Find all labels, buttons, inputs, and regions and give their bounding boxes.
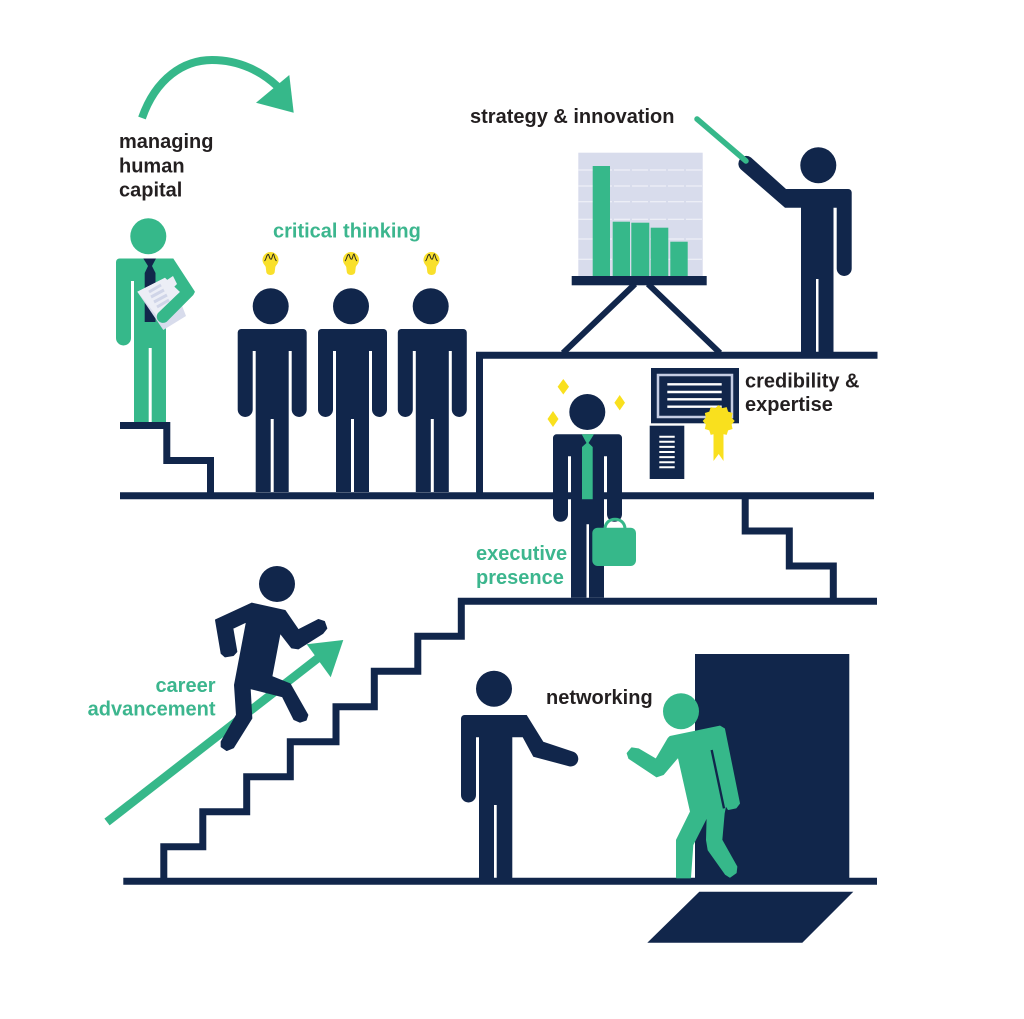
forearm <box>157 291 195 323</box>
icon: document <box>650 426 684 479</box>
figure: thinker 1 <box>238 288 307 492</box>
easel stand <box>563 276 720 353</box>
door shadow <box>647 892 853 943</box>
label: credibility & expertise: credibility & <box>745 370 859 392</box>
icon: briefcase <box>592 519 636 566</box>
upper floor with wall <box>480 355 878 496</box>
figure: presenter <box>738 147 852 352</box>
figure: executive <box>553 394 622 598</box>
figure: thinker 2 <box>318 288 387 492</box>
figure: networking man <box>461 671 578 878</box>
icon: light bulb 2 <box>343 252 359 275</box>
label: career advancement: advancement <box>88 699 216 721</box>
label: executive presence: presence <box>476 567 564 589</box>
label: managing human capital: capital <box>119 180 182 202</box>
icon: light bulb 1 <box>262 252 278 275</box>
figure: green networking person <box>627 693 739 878</box>
lower-right stairs <box>745 497 833 600</box>
icon: light bulb 3 <box>424 252 440 275</box>
label: managing human capital: human <box>119 156 185 178</box>
icon: certificate <box>651 368 739 423</box>
label: critical thinking: critical thinking <box>273 220 421 242</box>
icon: sparkles <box>548 379 625 427</box>
figure: thinker 3 <box>398 288 467 492</box>
main staircase and ground floor <box>123 601 877 881</box>
arrow: career advancement <box>107 640 343 822</box>
bar chart on stand <box>563 153 720 353</box>
label: career advancement: career <box>155 675 216 697</box>
figure: climbing runner <box>216 566 327 750</box>
icon: curved arrow <box>142 60 294 118</box>
label: managing human capital: managing <box>119 131 213 153</box>
label: executive presence: executive <box>476 543 567 565</box>
upper-left stairs and middle floor <box>120 426 874 496</box>
door <box>695 654 849 879</box>
label: strategy & innovation: strategy & innovation <box>470 106 674 128</box>
icon: pointer <box>697 119 746 161</box>
figure: green manager with clipboard <box>116 218 195 422</box>
label: networking: networking <box>546 687 653 709</box>
clipboard paper <box>137 276 186 330</box>
executive tie <box>582 434 594 499</box>
icon: rosette seal <box>703 405 735 461</box>
label: credibility & expertise: expertise <box>745 394 833 416</box>
tie <box>143 258 156 322</box>
